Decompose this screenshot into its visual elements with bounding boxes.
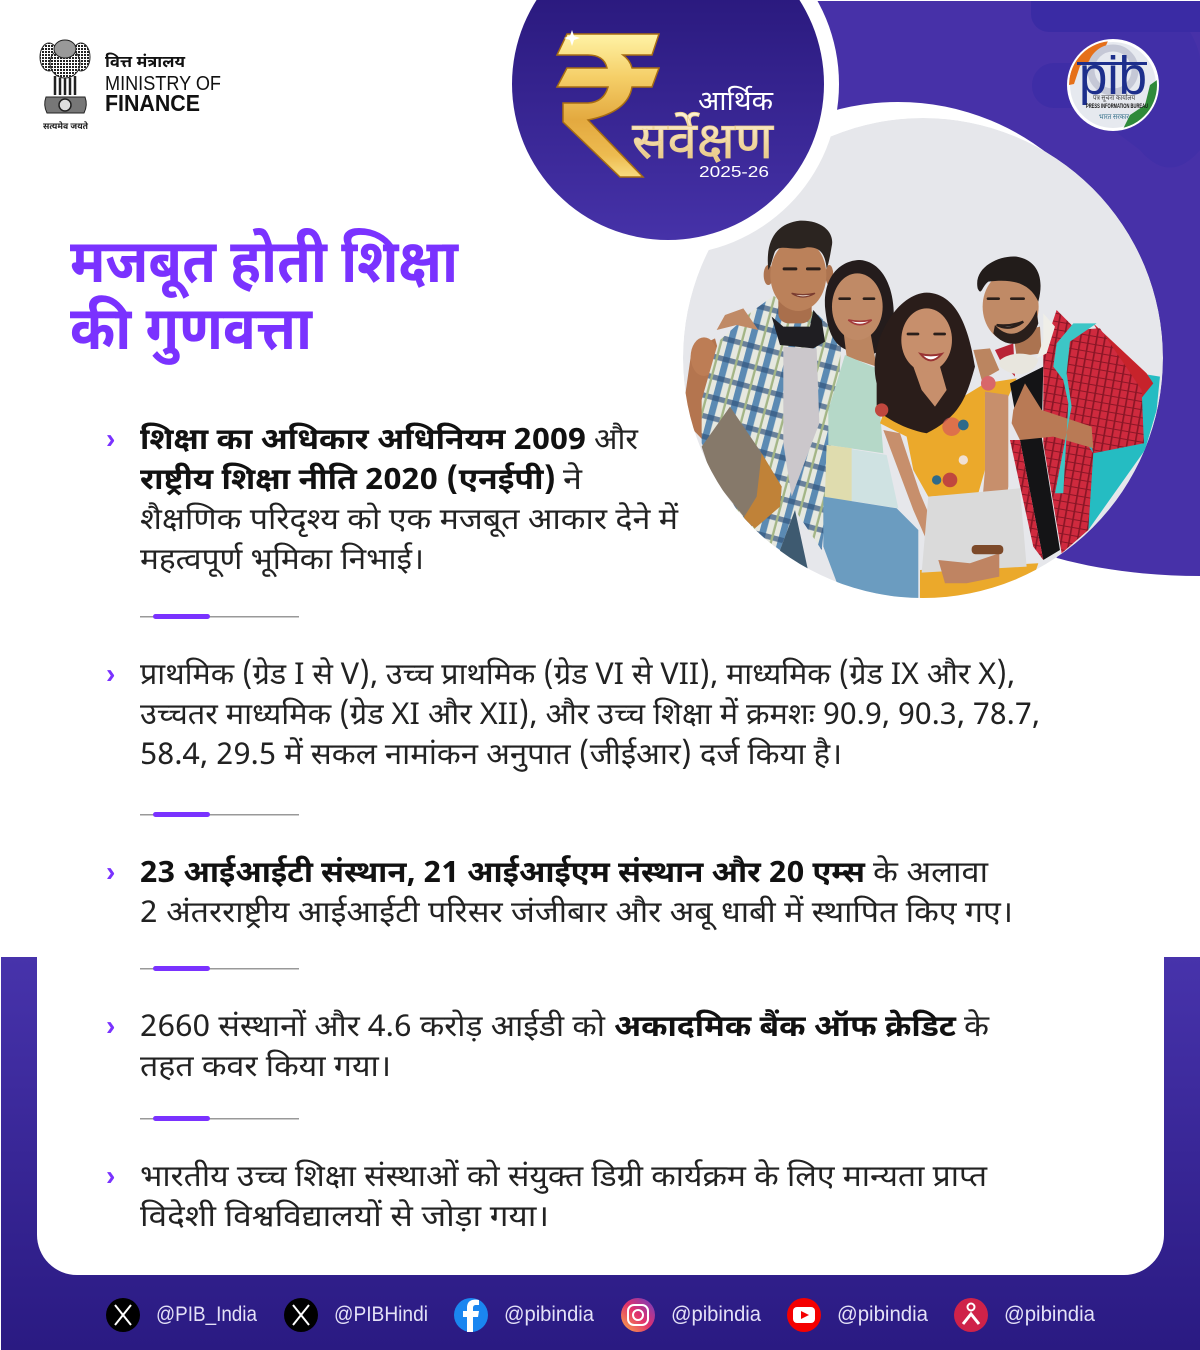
bullet 1 [106,422,679,582]
footer band [1,950,1200,1350]
logo: PIB: PRESS INFORMATION BUREAU [1086,104,1148,110]
divider 1 [140,614,299,619]
Instagram handle: @pibindia [671,1303,761,1326]
Koo handle [954,1298,1095,1332]
logo: Ministry of Finance: FINANCE [105,90,200,116]
bullet 4: अकादमिक बैंक ऑफ क्रेडिट [614,1008,957,1049]
YouTube handle: @pibindia [837,1303,928,1326]
panel: photo of four students [683,118,1163,600]
logo: Ministry of Finance [40,40,221,133]
bullet 2: › [106,658,115,689]
man 1 [686,338,717,439]
bullet 1: शैक्षणिक परिदृश्य को एक मजबूत आकार देने में [140,501,679,542]
icon: gold rupee symbol [557,30,659,177]
icon: national emblem: सत्यमेव जयते [43,119,88,133]
bullet 2: प्राथमिक (ग्रेड I से V), उच्च प्राथमिक (ग्रेड VI से VII), माध्यमिक (ग्रेड IX और X), [140,656,1015,697]
panel: economic survey badge [512,0,824,240]
logo: PIB: पत्र सूचना कार्यालय [1093,93,1136,103]
panel: economic survey badge: सर्वेक्षण [632,112,774,179]
bullet 2: 58.4, 29.5 में सकल नामांकन अनुपात (जीईआर) दर्ज किया है। [140,736,842,777]
logo: Ministry of Finance: MINISTRY OF [105,73,221,95]
icon: national emblem [40,40,90,133]
title: की गुणवत्ता [70,295,313,374]
panel: economic survey badge: 2025-26 [699,164,769,181]
bullet 3: 2 अंतरराष्ट्रीय आईआईटी परिसर जंजीबार और अबू धाबी में स्थापित किए गए। [140,895,1013,935]
top right purple background [800,1,1200,576]
bullet 1: ने [563,461,584,502]
YouTube handle [787,1298,928,1332]
X handle PIB_India [106,1298,257,1332]
bullet 5: भारतीय उच्च शिक्षा संस्थाओं को संयुक्त डिग्री कार्यक्रम के लिए मान्यता प्राप्त [140,1158,988,1199]
white crescent behind photo [655,102,1141,588]
bullet 3 [106,854,1013,935]
title [70,229,459,374]
bullet 5: › [106,1160,115,1191]
divider 3 [140,966,299,971]
white ring around survey circle [497,0,839,255]
Instagram handle [621,1298,761,1332]
X handle PIBHindi [284,1298,428,1332]
bullet 1: शिक्षा का अधिकार अधिनियम 2009 [140,422,586,462]
Facebook handle [454,1298,594,1332]
bullet 5: विदेशी विश्वविद्यालयों से जोड़ा गया। [140,1198,549,1239]
bullet 2: उच्चतर माध्यमिक (ग्रेड XI और XII), और उच्च शिक्षा में क्रमशः 90.9, 90.3, 78.7, [140,696,1040,737]
bullet 5 [106,1158,988,1239]
logo: PIB: भारत सरकार [1099,113,1129,122]
bullet 1: और [594,422,639,462]
bullet 3: › [106,856,115,887]
Facebook handle: @pibindia [504,1303,594,1326]
X handle PIBHindi: @PIBHindi [334,1303,428,1326]
Koo handle: @pibindia [1004,1303,1095,1326]
bullet 4: तहत कवर किया गया। [140,1049,391,1089]
survey title: आर्थिक [698,85,774,122]
logo: PIB [1067,39,1159,131]
bullet 1: राष्ट्रीय शिक्षा नीति 2020 (एनईपी) [140,462,556,502]
bullet 1: महत्वपूर्ण भूमिका निभाई। [140,542,424,582]
social handles row [106,1298,1095,1332]
bullet 4 [106,1008,990,1089]
divider 2 [140,812,299,817]
woman 2 [825,260,894,355]
woman 3 [880,378,1017,497]
bullet 1: › [106,423,115,454]
title: मजबूत होती शिक्षा [70,229,459,307]
bullet 3: के अलावा [873,854,989,895]
logo: PIB: pib [1079,46,1147,106]
bullet 4: › [106,1010,115,1041]
X handle PIB_India: @PIB_India [156,1303,257,1326]
bullet 3: 23 आईआईटी संस्थान, 21 आईआईएम संस्थान और 20 एम्स [140,855,866,895]
divider 4 [140,1116,299,1121]
bullet 2 [106,656,1040,777]
bullet 4: के [964,1008,990,1049]
logo: Ministry of Finance: वित्त मंत्रालय [105,53,186,74]
bullet 4: 2660 संस्थानों और 4.6 करोड़ आईडी को [140,1009,606,1049]
man 4 [1088,374,1160,530]
